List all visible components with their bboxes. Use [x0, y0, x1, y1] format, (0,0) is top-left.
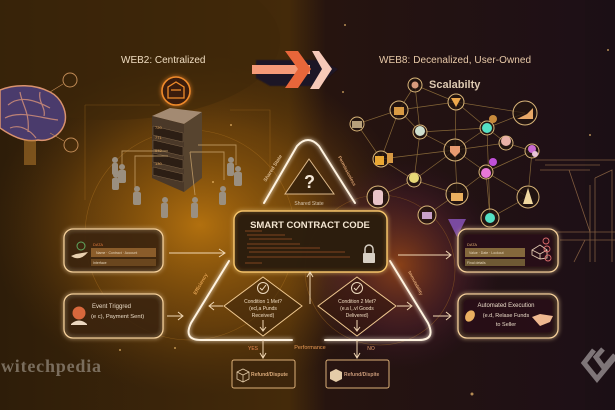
label: yes: YES — [248, 346, 259, 352]
panel: refund right — [326, 360, 389, 388]
diamond: condition 1: Condition 1 Met? — [244, 299, 282, 305]
circuit decoration right — [535, 160, 615, 262]
server rack: 720 — [155, 125, 162, 130]
icon: handshake — [532, 314, 553, 326]
panel: data output: DATA — [467, 242, 477, 247]
server rack: 130 — [155, 161, 162, 166]
panel: data output — [458, 229, 558, 272]
panel: refund left — [232, 360, 295, 388]
diamond: condition 2: (e.a l,.vl Goods — [340, 306, 374, 312]
diamond: condition 1 — [224, 277, 302, 336]
server rack — [152, 108, 202, 192]
shared state warning triangle: ? — [304, 172, 315, 192]
panel: event triggered: (e c), Payment Sent) — [91, 314, 144, 320]
server rack: 771 — [155, 135, 162, 140]
diamond: condition 2 — [318, 277, 396, 336]
connector lines to users — [122, 145, 236, 200]
label: immutability: Immutability — [407, 270, 424, 296]
label: efficiency: Efficiency — [193, 272, 210, 296]
data fields: Name · Contract · Account — [96, 251, 137, 255]
panel: event triggered: Event Triggred — [92, 304, 131, 310]
watermark text: witechpedia — [1, 356, 102, 376]
panel: event triggered — [64, 294, 163, 338]
shared state warning triangle — [285, 159, 334, 207]
decentralized network — [350, 78, 539, 237]
icon: lock — [363, 245, 375, 263]
panel: automated execution: Automated Execution — [477, 303, 535, 309]
panel: automated execution — [458, 294, 558, 338]
users left — [112, 157, 168, 218]
flow arrows — [167, 249, 451, 358]
panel: automated execution: (e.d, Relase Funds — [483, 313, 529, 319]
panel: smart contract code — [234, 211, 387, 272]
panel: automated execution: to Seller — [496, 322, 516, 328]
label: performance: Performance — [294, 345, 326, 351]
shared state warning triangle: Shared State — [294, 201, 324, 207]
right heading: WEB8: Decenalized, User-Owned — [379, 55, 531, 66]
network node icons — [352, 82, 538, 237]
panel: data output: Value · Date · Lockout — [469, 251, 504, 255]
data fields — [91, 242, 156, 266]
label: shared state: Shared State — [263, 154, 284, 183]
users right — [191, 157, 242, 218]
panel: data output: Final details — [467, 261, 486, 265]
watermark logo — [584, 349, 615, 379]
panel: data input — [64, 229, 163, 272]
triangle frame — [189, 140, 431, 340]
diamond: condition 2: Delivered) — [346, 313, 369, 319]
icon: globe user — [71, 306, 87, 325]
label: no: NO — [367, 346, 375, 352]
contract title: SMART CONTRACT CODE — [250, 220, 370, 231]
diamond: condition 1: (ecl,a Punds — [249, 306, 277, 312]
icon: package — [532, 238, 551, 261]
code lines — [245, 231, 350, 263]
diamond: condition 2: Condition 2 Met? — [338, 299, 376, 305]
icon: central orange badge — [162, 77, 190, 105]
server rack: 972 — [155, 148, 162, 153]
icon: tag — [463, 309, 477, 323]
label: permissionless: Permissionless — [337, 155, 357, 187]
data fields: Interface — [93, 261, 107, 265]
transition arrow — [252, 51, 338, 89]
scalability heading: Scalabilty — [429, 79, 481, 91]
icon: brain — [0, 73, 78, 165]
data fields: DATA — [93, 242, 103, 247]
panel: refund left: Refund/Dispute — [251, 372, 288, 378]
star particles — [119, 24, 609, 396]
left heading: WEB2: Centralized — [121, 55, 205, 66]
panel: refund right: Refund/Dispite — [344, 372, 379, 378]
icon: hand with coin — [71, 242, 88, 258]
diamond: condition 1: Received) — [252, 313, 275, 319]
